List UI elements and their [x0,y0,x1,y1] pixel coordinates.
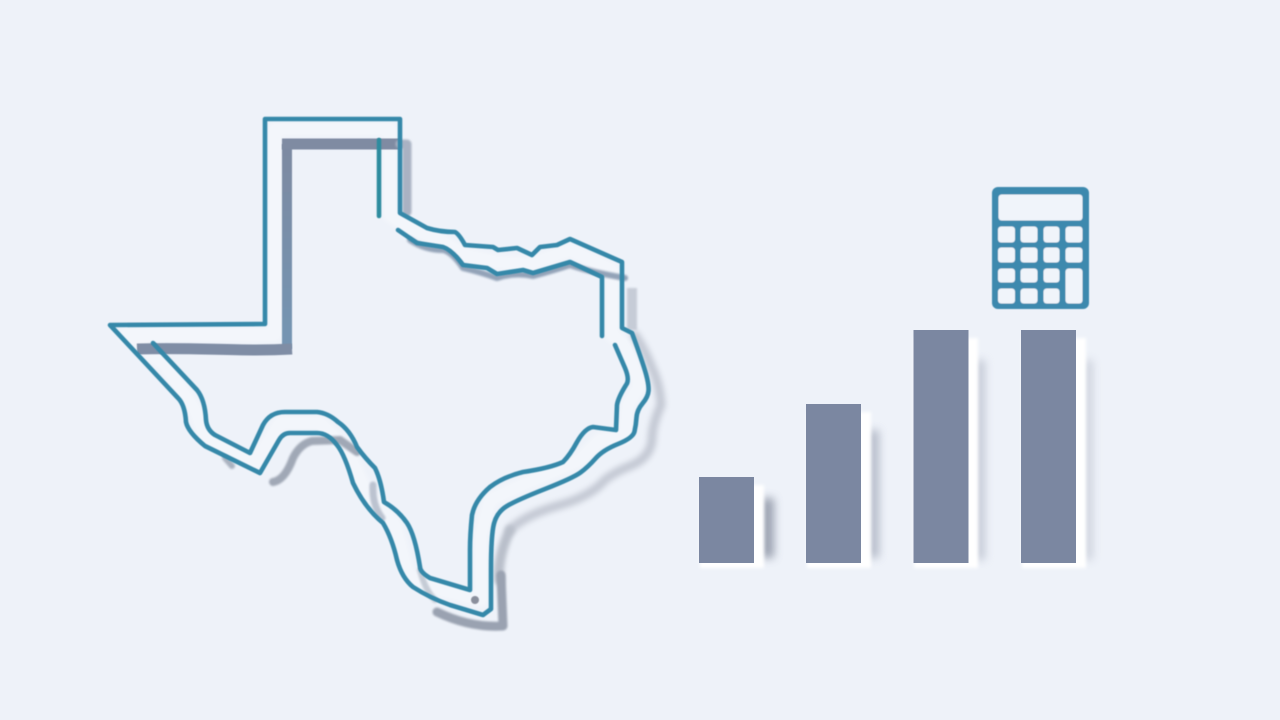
Texas outer outline [110,119,649,615]
bar 3 [914,330,985,568]
bar 1 [699,477,774,568]
light band between Texas lines [125,129,640,600]
icon: Texas map outline [110,119,661,626]
Texas inner outline [153,140,628,590]
bar chart [699,330,1093,568]
Texas drop shadow [137,144,661,626]
bar 2 [806,404,879,568]
icon: calculator [992,187,1089,309]
bar 4 [1021,330,1093,568]
